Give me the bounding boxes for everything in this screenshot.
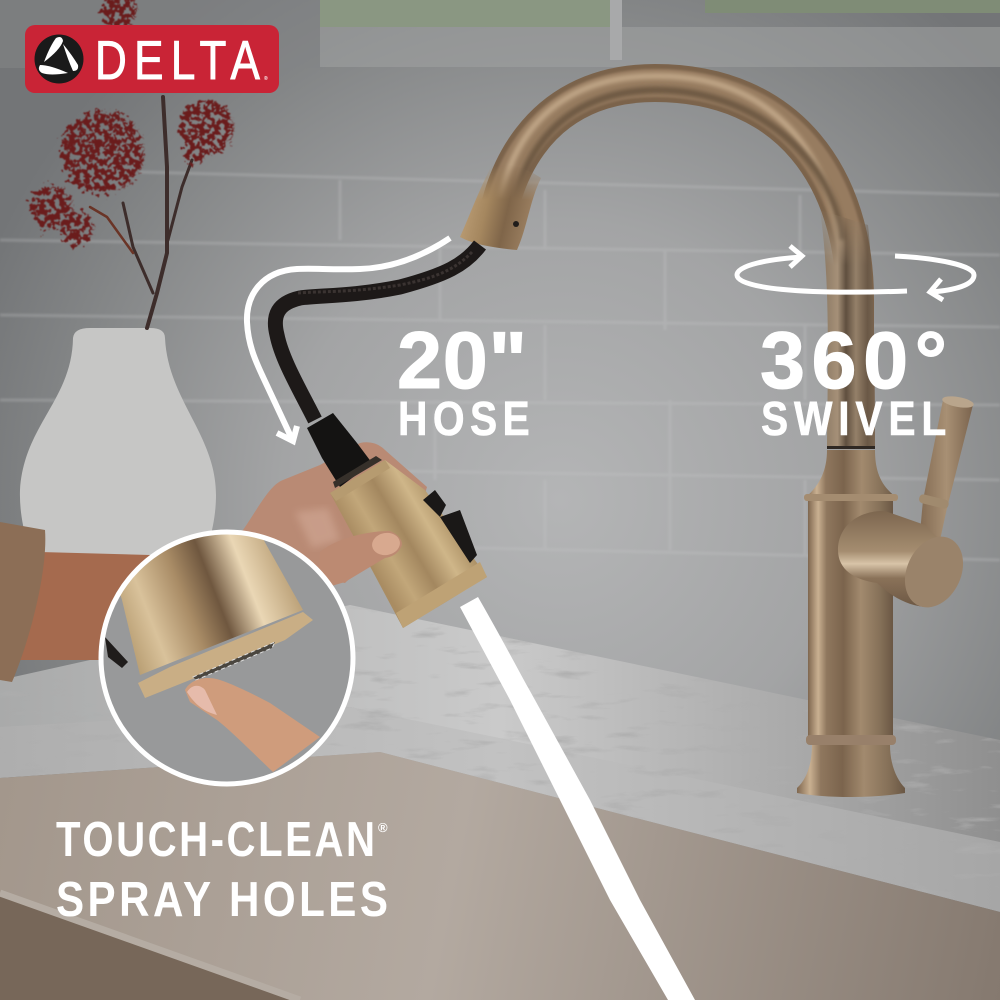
label: touch-clean spray holes: TOUCH-CLEAN xyxy=(56,812,375,867)
logo: Delta badge: ® xyxy=(264,75,268,82)
logo mark xyxy=(34,34,84,84)
faucet neck widening xyxy=(820,210,875,448)
sprayer connector xyxy=(307,413,372,487)
label: 20 inch hose xyxy=(397,316,530,446)
left swivel arrow xyxy=(737,257,907,292)
faucet lever handle xyxy=(920,400,973,540)
sprayer rim xyxy=(396,562,487,628)
arm and hand xyxy=(0,442,427,682)
thumb over sprayer xyxy=(318,531,402,590)
label: 360 swivel: 360° xyxy=(760,316,947,406)
faucet spout arc xyxy=(495,76,855,448)
vase xyxy=(20,328,216,575)
inset finger xyxy=(185,678,320,772)
hose arrow xyxy=(247,238,450,441)
countertop xyxy=(0,605,1000,912)
stems xyxy=(90,97,192,328)
swivel arrows xyxy=(737,246,974,300)
sprayer body xyxy=(330,460,487,628)
hose xyxy=(275,245,480,420)
sprayer buttons xyxy=(423,490,477,563)
spout head xyxy=(460,164,541,250)
faucet xyxy=(460,76,975,797)
vase with red branches xyxy=(20,0,234,575)
label: touch-clean spray holes: ® xyxy=(378,820,388,835)
arm xyxy=(10,552,150,660)
faucet neck and bell xyxy=(806,450,896,497)
sweater sleeve xyxy=(0,522,45,682)
label: 20 inch hose: 20" xyxy=(397,316,527,406)
inset sprayer rim xyxy=(138,612,313,698)
inset spray holes xyxy=(193,642,275,680)
inset sprayer xyxy=(120,534,303,675)
faucet handle hub xyxy=(838,511,945,607)
label: 360 swivel xyxy=(760,316,947,446)
red berry clusters xyxy=(30,0,234,245)
faucet body xyxy=(808,500,893,737)
pull-down sprayer xyxy=(307,413,487,628)
sink basin xyxy=(0,752,1000,1000)
label: touch-clean spray holes xyxy=(56,812,388,927)
faucet base xyxy=(797,745,905,797)
label: touch-clean spray holes: SPRAY HOLES xyxy=(56,872,388,927)
right swivel arrow xyxy=(895,256,974,292)
water stream xyxy=(460,597,695,1000)
hand xyxy=(200,442,427,583)
logo: Delta badge: DELTA xyxy=(95,29,260,91)
label: 360 swivel: SWIVEL xyxy=(761,393,946,446)
circular inset: spray holes xyxy=(100,530,353,784)
spout outlet hole xyxy=(513,221,519,227)
label: 20 inch hose: HOSE xyxy=(398,393,530,446)
logo: Delta badge xyxy=(25,25,279,93)
